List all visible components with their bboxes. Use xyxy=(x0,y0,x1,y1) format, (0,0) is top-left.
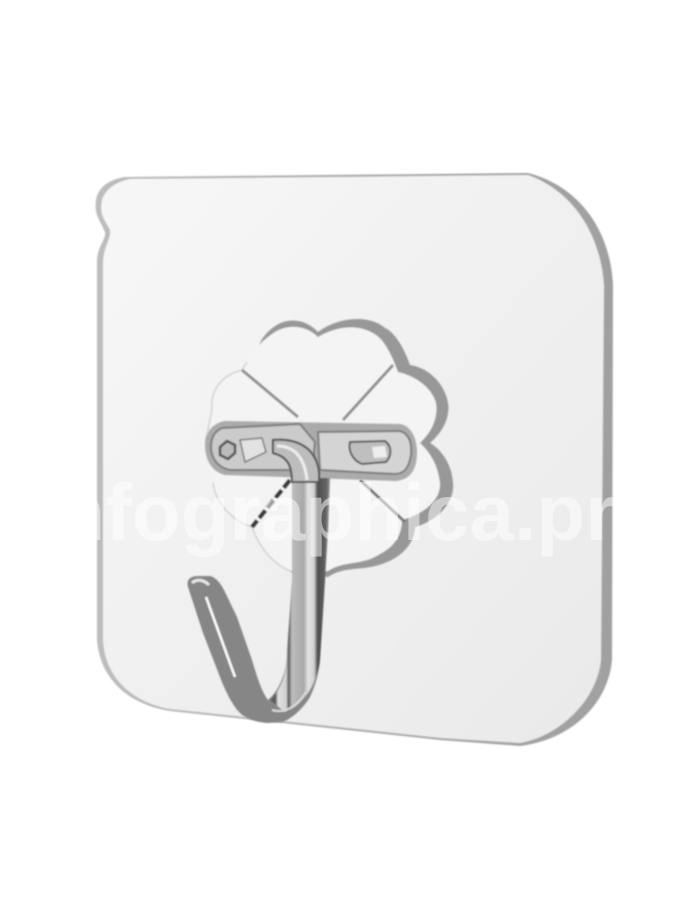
flower-shaped hook mount xyxy=(205,319,453,577)
flower petal dividers xyxy=(242,365,405,527)
adhesive panel xyxy=(96,173,613,746)
metal hook xyxy=(187,440,330,723)
watermark: infographica.pro xyxy=(34,468,665,557)
mounting bar xyxy=(205,421,417,481)
bar screw details xyxy=(220,441,235,459)
hook highlight xyxy=(206,597,235,677)
flower left outline xyxy=(206,362,292,572)
